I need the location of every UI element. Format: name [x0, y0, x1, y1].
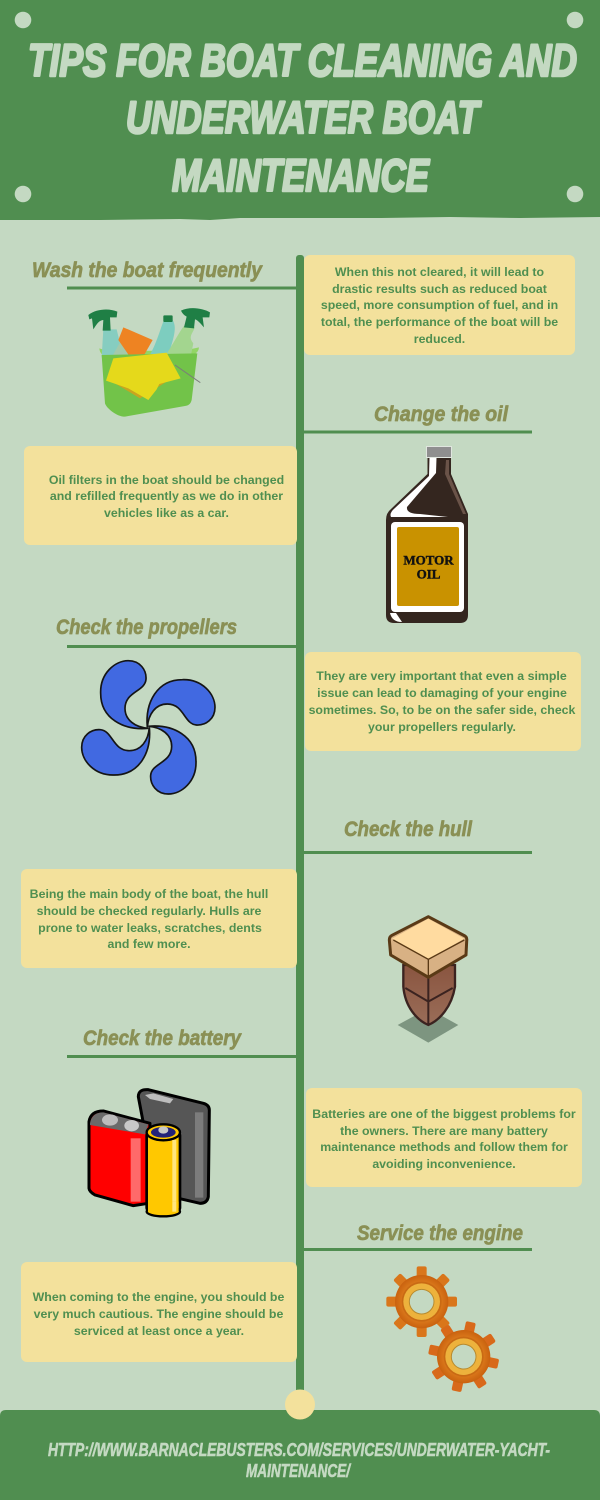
text box: oil filters: Oil filters in the boat should be changed [49, 473, 284, 487]
text box: wash the boat [304, 255, 575, 355]
timeline end dot [285, 1390, 315, 1420]
heading rules [67, 286, 532, 1251]
text box: hull: Being the main body of the boat, the hull [30, 887, 268, 901]
text box: engine [21, 1262, 297, 1362]
section: check the propellers heading: Check the propellers [56, 616, 237, 639]
text box: wash the boat: speed, more consumption of fuel, and in [321, 298, 558, 312]
section: check the hull heading: Check the hull [344, 818, 473, 841]
gear two [422, 1315, 506, 1399]
text box: oil filters [24, 446, 297, 545]
text box: wash the boat: When this not cleared, it will lead to [335, 265, 545, 279]
text box: propellers: sometimes. So, to be on the safer side, check [309, 703, 576, 717]
text box: hull: prone to water leaks, scratches, dents [38, 921, 262, 935]
header corner dots [15, 12, 583, 202]
text box: hull: should be checked regularly. Hulls are [37, 904, 262, 918]
title [28, 35, 577, 201]
text box: wash the boat: drastic results such as reduced boat [332, 282, 547, 296]
section: service the engine heading: Service the engine [357, 1222, 523, 1245]
section: check the battery heading: Check the battery [83, 1027, 242, 1050]
text box: batteries: Batteries are one of the biggest problems for [312, 1107, 576, 1121]
header banner [0, 0, 600, 220]
text box: propellers: issue can lead to damaging of your engine [317, 686, 567, 700]
text box: hull [21, 869, 297, 968]
timeline spine [296, 255, 304, 1400]
icon: gears [386, 1266, 506, 1399]
section: change the oil heading: Change the oil [374, 403, 509, 426]
text box: hull: and few more. [108, 937, 190, 951]
icon: cleaning bucket [88, 308, 210, 417]
icon: boat hull [389, 917, 467, 1043]
text box: propellers: your propellers regularly. [368, 720, 516, 734]
text box: wash the boat: reduced. [414, 332, 465, 346]
text box: engine: very much cautious. The engine should be [34, 1307, 283, 1321]
icon: motor oil bottle: OIL [417, 566, 441, 582]
text box: engine: serviced at least once a year. [74, 1324, 244, 1338]
text box: wash the boat: total, the performance of the boat will be [321, 315, 558, 329]
footer panel [0, 1410, 600, 1500]
title: UNDERWATER BOAT [126, 92, 482, 143]
text box: propellers [305, 652, 581, 751]
text box: batteries: maintenance methods and follow them for [320, 1140, 568, 1154]
text box: oil filters: and refilled frequently as we do in other [50, 489, 283, 503]
section: wash the boat heading: Wash the boat frequently [32, 259, 263, 282]
icon: motor oil bottle: MOTOR [403, 552, 454, 568]
title: MAINTENANCE [172, 150, 431, 201]
icon: motor oil bottle [386, 446, 468, 623]
icon: batteries [89, 1090, 209, 1216]
icon: propeller [82, 661, 215, 794]
text box: oil filters: vehicles like as a car. [104, 506, 229, 520]
text box: batteries: avoiding inconvenience. [372, 1157, 516, 1171]
text box: engine: When coming to the engine, you should be [33, 1290, 284, 1304]
text box: propellers: They are very important that even a simple [316, 669, 567, 683]
gear one [386, 1266, 457, 1337]
text box: batteries [306, 1088, 582, 1187]
text box: batteries: the owners. There are many battery [340, 1124, 548, 1138]
footer link text [48, 1440, 550, 1481]
footer link text: MAINTENANCE/ [246, 1461, 352, 1481]
